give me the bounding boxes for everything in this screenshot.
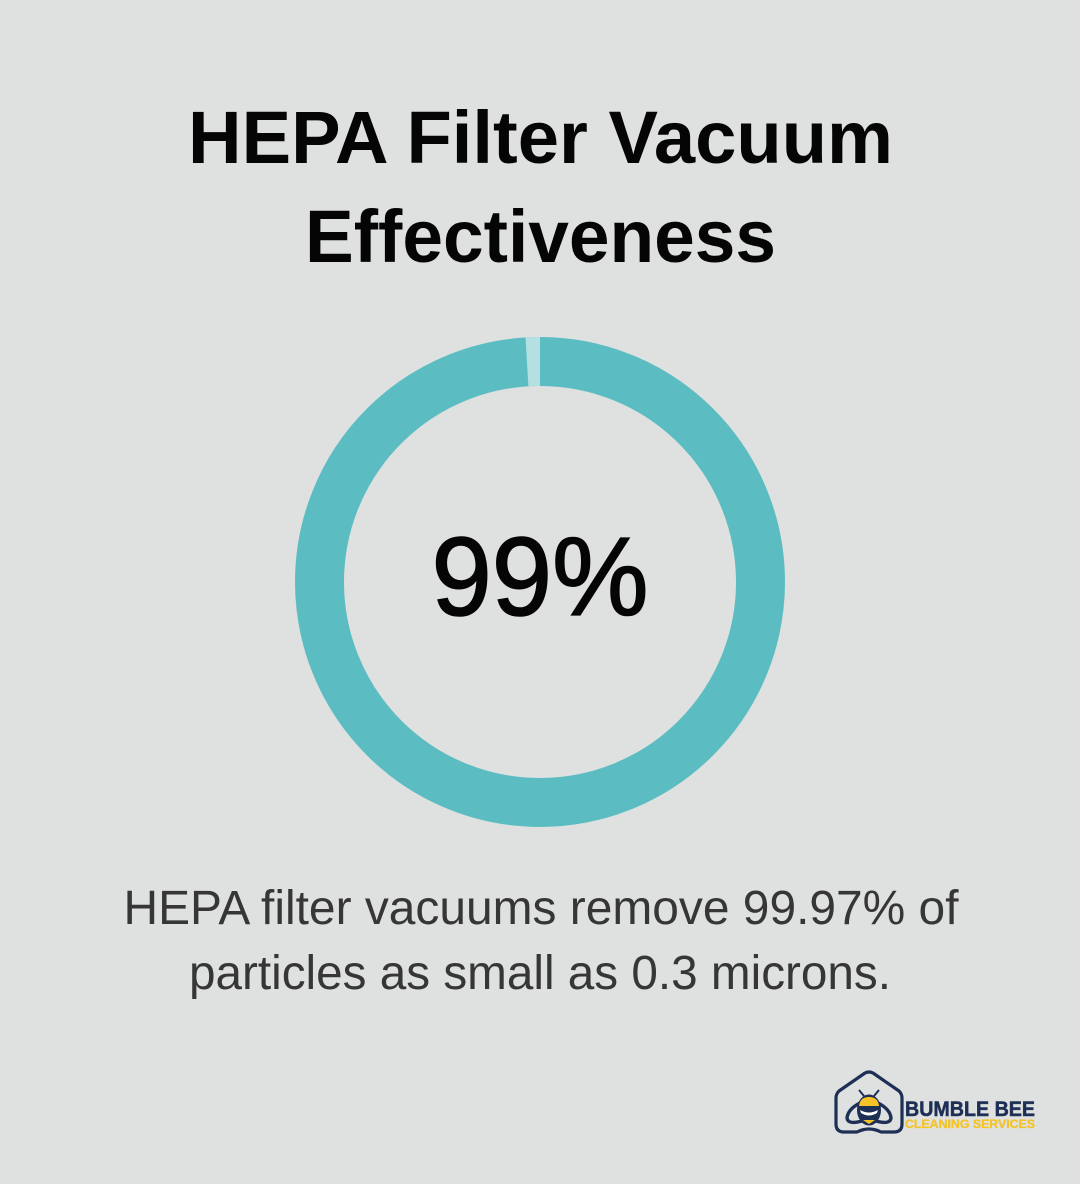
donut chart: 99%	[320, 337, 760, 802]
center value: 99%	[432, 515, 648, 639]
description text: particles as small as 0.3 microns.	[189, 947, 891, 1000]
logo: Bumble Bee Cleaning Services	[836, 1072, 1035, 1132]
title	[188, 96, 893, 278]
icon: bee	[847, 1090, 891, 1126]
description text: HEPA filter vacuums remove 99.97% of	[124, 882, 959, 935]
logo tagline: CLEANING SERVICES	[905, 1117, 1035, 1131]
icon: house outline	[836, 1072, 902, 1132]
description text	[124, 882, 959, 1000]
title: HEPA Filter Vacuum	[188, 96, 893, 179]
logo wordmark: BUMBLE BEE	[905, 1098, 1035, 1121]
remaining 1% segment	[526, 337, 540, 386]
title: Effectiveness	[305, 195, 776, 278]
